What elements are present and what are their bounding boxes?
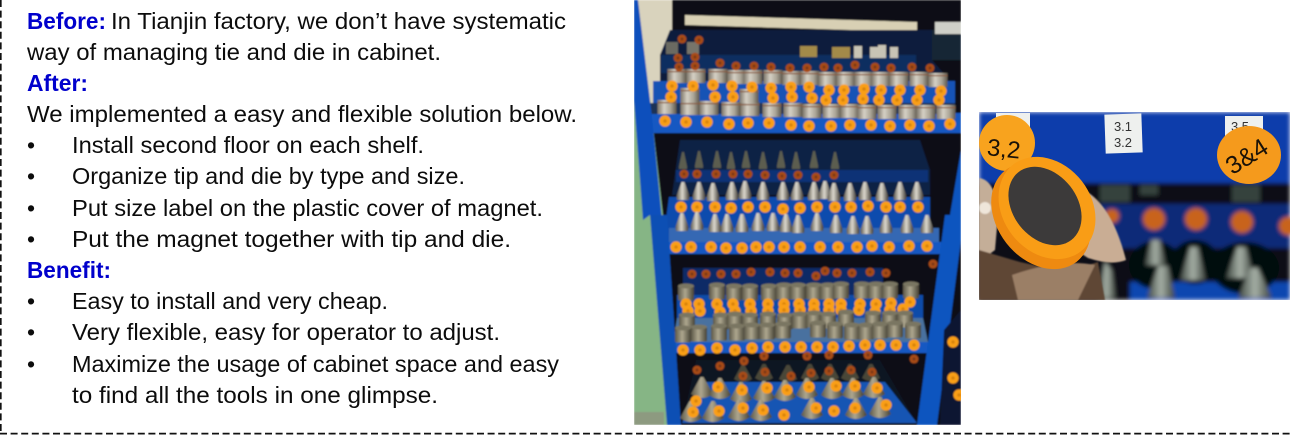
- shelf four floor: [682, 360, 917, 423]
- size labels: 3.1: [1114, 119, 1132, 134]
- large dies shelf four: [680, 351, 892, 422]
- size labels: 3.5: [1231, 119, 1249, 134]
- list: benefits: Easy to install and very cheap.: [72, 288, 388, 314]
- cylinders row two: [658, 88, 956, 119]
- right cabinet post: [917, 150, 961, 425]
- list: benefits: Very flexible, easy for operator to adjust.: [72, 319, 500, 345]
- orange magnet 3.2: [979, 115, 1035, 171]
- wall behind cabinet: [636, 0, 674, 104]
- list: benefits: •: [27, 288, 35, 314]
- tips row three and magnets: [670, 212, 934, 254]
- lower blue strip: [1100, 204, 1290, 248]
- list: after steps: •: [27, 163, 35, 189]
- shelf three: [678, 281, 904, 284]
- list: after steps: Put the magnet together with tip and die.: [72, 226, 511, 252]
- list: after steps: Organize tip and die by type and size.: [72, 163, 465, 189]
- heading: after: After:: [27, 70, 88, 96]
- size labels: [996, 113, 1263, 154]
- list: after steps: Put size label on the plastic cover of magnet.: [72, 195, 543, 221]
- list: benefits: [27, 288, 560, 408]
- shelf two back wall: [672, 140, 930, 195]
- heading: before paragraph: way of managing tie and die in cabinet.: [26, 39, 441, 65]
- shelf one surfaces and strips: [653, 81, 955, 104]
- left cabinet post: [634, 0, 662, 220]
- magnets shelf one: [659, 35, 956, 132]
- list: after steps: Install second floor on each shelf.: [72, 132, 424, 158]
- magnet back held in hand: [991, 156, 1096, 270]
- blue shelf strip: [979, 112, 1290, 183]
- text block: before, after, benefit: [26, 8, 577, 408]
- heading: before paragraph: In Tianjin factory, we don’t have systematic: [111, 8, 566, 34]
- list: after steps: •: [27, 226, 35, 252]
- list: after steps: •: [27, 132, 35, 158]
- list: benefits: to find all the tools in one glimpse.: [72, 382, 438, 408]
- blurred lower magnets: [1105, 208, 1290, 235]
- blurred tips with shadow: [1097, 185, 1279, 298]
- hand holding magnet: [979, 178, 1126, 300]
- cylinders row one: [668, 69, 948, 87]
- top cabinet window strip: [685, 15, 917, 32]
- photo: cabinet with tips and dies: [634, 0, 965, 425]
- list: after steps: [27, 132, 543, 252]
- photo: close-up of orange magnet in hand: [971, 112, 1290, 300]
- list: benefits: •: [27, 351, 35, 377]
- orange magnet 3.2: 3,2: [986, 134, 1022, 165]
- heading: before paragraph: [26, 8, 566, 65]
- tips row front and magnets: [675, 181, 924, 215]
- list: after steps: •: [27, 195, 35, 221]
- heading: before paragraph: Before:: [27, 8, 106, 34]
- shelf one back wall: [659, 28, 943, 82]
- dies shelf three: [675, 267, 921, 356]
- size labels: 3.2: [1114, 135, 1132, 150]
- list: benefits: Maximize the usage of cabinet space and easy: [72, 351, 560, 377]
- text: solution intro: We implemented a easy and flexible solution below.: [27, 101, 577, 127]
- orange magnet 3.4: [1217, 126, 1281, 184]
- tips row back: [679, 151, 839, 181]
- list: benefits: •: [27, 319, 35, 345]
- back items top shelf: [666, 42, 898, 58]
- orange magnet 3.4: 3&4: [1221, 133, 1273, 180]
- heading: benefit: Benefit:: [27, 257, 111, 283]
